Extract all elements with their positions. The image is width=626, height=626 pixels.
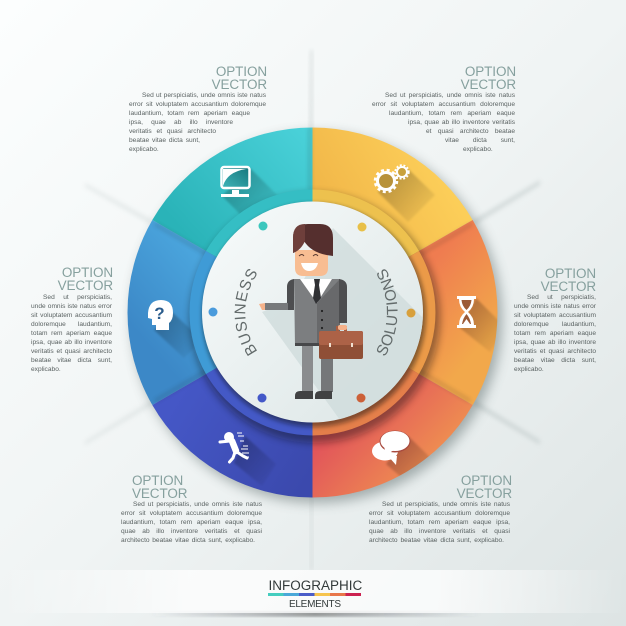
text block: middle right: explicabo.	[514, 366, 544, 373]
text block: top left: error sit voluptatem accusantium doloremque	[129, 101, 266, 108]
text block: bottom right: laudantium, totam rem aperiam eaque ipsa,	[369, 519, 510, 526]
heading: middle left option: VECTOR	[58, 278, 113, 293]
segment: teal	[152, 128, 312, 312]
text block: bottom left: quae ab illo inventore veritatis et quasi	[121, 528, 262, 535]
shoes	[295, 391, 332, 399]
heading: top left option	[212, 64, 267, 92]
curved text: SOLUTIONS	[377, 269, 398, 356]
face	[295, 250, 328, 276]
text block: bottom right: architecto beatae vitae dicta sunt, explicabo.	[369, 537, 504, 544]
text block: middle right	[514, 294, 596, 373]
text block: bottom left: architecto beatae vitae dicta sunt, explicabo.	[121, 537, 255, 544]
icon: gears	[375, 165, 409, 192]
text block: middle left: Sed ut perspiciatis,	[43, 294, 112, 301]
text block: top right: vitae dicta sunt,	[445, 137, 515, 144]
text block: middle left: totam rem aperiam eaque	[31, 330, 112, 337]
segment: indigo	[152, 312, 312, 498]
text block: middle left: sit voluptatem accusantium	[31, 312, 112, 319]
text block: top left	[129, 92, 266, 153]
heading: middle left option	[58, 265, 113, 293]
heading: bottom left option: VECTOR	[132, 486, 187, 501]
heading: bottom right option: VECTOR	[457, 486, 512, 501]
segment fold shadows	[155, 127, 472, 401]
text block: bottom right: Sed ut perspiciatis, unde omnis iste natus	[382, 501, 510, 508]
text block: bottom left: error sit voluptatem accusantium doloremque	[121, 510, 262, 517]
text block: middle right: totam rem aperiam eaque	[514, 330, 596, 337]
text block: top right: ipsa, quae ab illo inventore veritatis	[408, 119, 515, 126]
heading: top right option: VECTOR	[461, 77, 516, 92]
text block: top right: Sed ut perspiciatis, unde omnis iste natus	[385, 92, 515, 99]
person long shadow	[262, 228, 440, 420]
footer band	[0, 570, 626, 616]
center disc shadow	[202, 203, 426, 427]
inner ring shadow	[190, 193, 440, 443]
icon: head with question mark	[148, 300, 173, 330]
text block: middle right: veritatis et quasi architecto	[514, 348, 596, 355]
footer title: INFOGRAPHIC	[268, 578, 363, 593]
text block: top right: laudantium, totam rem aperiam eaque	[389, 110, 515, 117]
segment: red	[312, 312, 473, 498]
text block: top left: ipsa, quae ab illo inventore	[129, 119, 233, 126]
text block: middle right: Sed ut perspiciatis,	[527, 294, 596, 301]
segment: yellow	[312, 128, 473, 312]
inner ring	[190, 190, 435, 436]
text block: top right	[372, 92, 515, 153]
wheel outer segments	[128, 128, 497, 498]
text block: middle left: veritatis et quasi architecto	[31, 348, 112, 355]
text block: middle right: ipsa, quae ab illo inventore	[514, 339, 596, 346]
dots	[208, 222, 416, 402]
heading: bottom left option	[132, 473, 187, 501]
hair	[293, 224, 333, 256]
text block: top left: laudantium, totam rem aperiam eaque	[129, 110, 250, 117]
heading: middle right option	[540, 266, 596, 294]
businessman	[259, 224, 363, 399]
heading: bottom left option: OPTION	[132, 473, 183, 488]
text block: bottom right: quae ab illo inventore veritatis et quasi	[369, 528, 510, 535]
text block: top left: explicabo.	[129, 146, 159, 153]
segment: blue	[128, 220, 312, 405]
wheel drop shadow	[132, 133, 502, 503]
icon: running man	[220, 432, 249, 462]
icon: speech bubbles	[372, 430, 410, 465]
text block: bottom right: error sit voluptatem accusantium doloremque	[369, 510, 510, 517]
text block: top right: error sit voluptatem accusantium doloremque	[372, 101, 515, 108]
text block: middle left	[31, 294, 112, 373]
text block: middle left: explicabo.	[31, 366, 61, 373]
heading: bottom right option: OPTION	[461, 473, 512, 488]
text block: top left: veritatis et quasi architecto	[129, 128, 216, 135]
text block: middle left: beatae vitae dicta sunt,	[31, 357, 112, 364]
center disc	[202, 202, 423, 422]
text block: middle left: ipsa, quae ab illo inventore	[31, 339, 112, 346]
briefcase	[336, 326, 347, 332]
heading: bottom right option	[456, 473, 512, 501]
pointing arm	[265, 303, 288, 310]
heading: middle right option: VECTOR	[541, 279, 596, 294]
text block: bottom left: laudantium, totam rem aperiam eaque ipsa,	[121, 519, 262, 526]
icon long shadows	[154, 166, 506, 490]
jacket	[294, 279, 340, 346]
shirt and tie	[300, 279, 332, 303]
text block: middle left: doloremque laudantium,	[31, 321, 112, 328]
text block: top left: Sed ut perspiciatis, unde omnis iste natus	[142, 92, 266, 99]
heading: top right option: OPTION	[465, 64, 516, 79]
text block: bottom left	[121, 501, 262, 544]
text block: bottom right	[369, 501, 510, 544]
text block: middle left: unde omnis iste natus error	[31, 303, 112, 310]
text block: middle right: doloremque laudantium,	[514, 321, 596, 328]
heading: middle right option: OPTION	[545, 266, 596, 281]
segment: orange	[312, 220, 497, 405]
text block: middle right: sit voluptatem accusantium	[514, 312, 596, 319]
sleeves	[287, 279, 347, 323]
color bar	[268, 593, 361, 596]
icon: hourglass	[457, 296, 476, 328]
footer subtitle: ELEMENTS	[289, 599, 341, 610]
text block: bottom left: Sed ut perspiciatis, unde omnis iste natus	[133, 501, 262, 508]
text block: top left: beatae vitae dicta sunt,	[129, 137, 200, 144]
text block: middle right: beatae vitae dicta sunt,	[514, 357, 596, 364]
heading: top right option	[460, 64, 516, 92]
icon: monitor	[221, 167, 250, 197]
curved text: BUSINESS: BUSINESS	[234, 269, 257, 356]
heading: middle left option: OPTION	[62, 265, 113, 280]
legs	[302, 345, 313, 392]
icon: head with question mark: ?	[154, 304, 165, 323]
heading: top left option: VECTOR	[212, 77, 267, 92]
heading: top left option: OPTION	[216, 64, 267, 79]
curved text: SOLUTIONS: SOLUTIONS	[377, 269, 398, 356]
text block: top right: et quasi architecto beatae	[426, 128, 515, 135]
text block: middle right: unde omnis iste natus error	[514, 303, 596, 310]
text block: top right: explicabo.	[463, 146, 493, 153]
